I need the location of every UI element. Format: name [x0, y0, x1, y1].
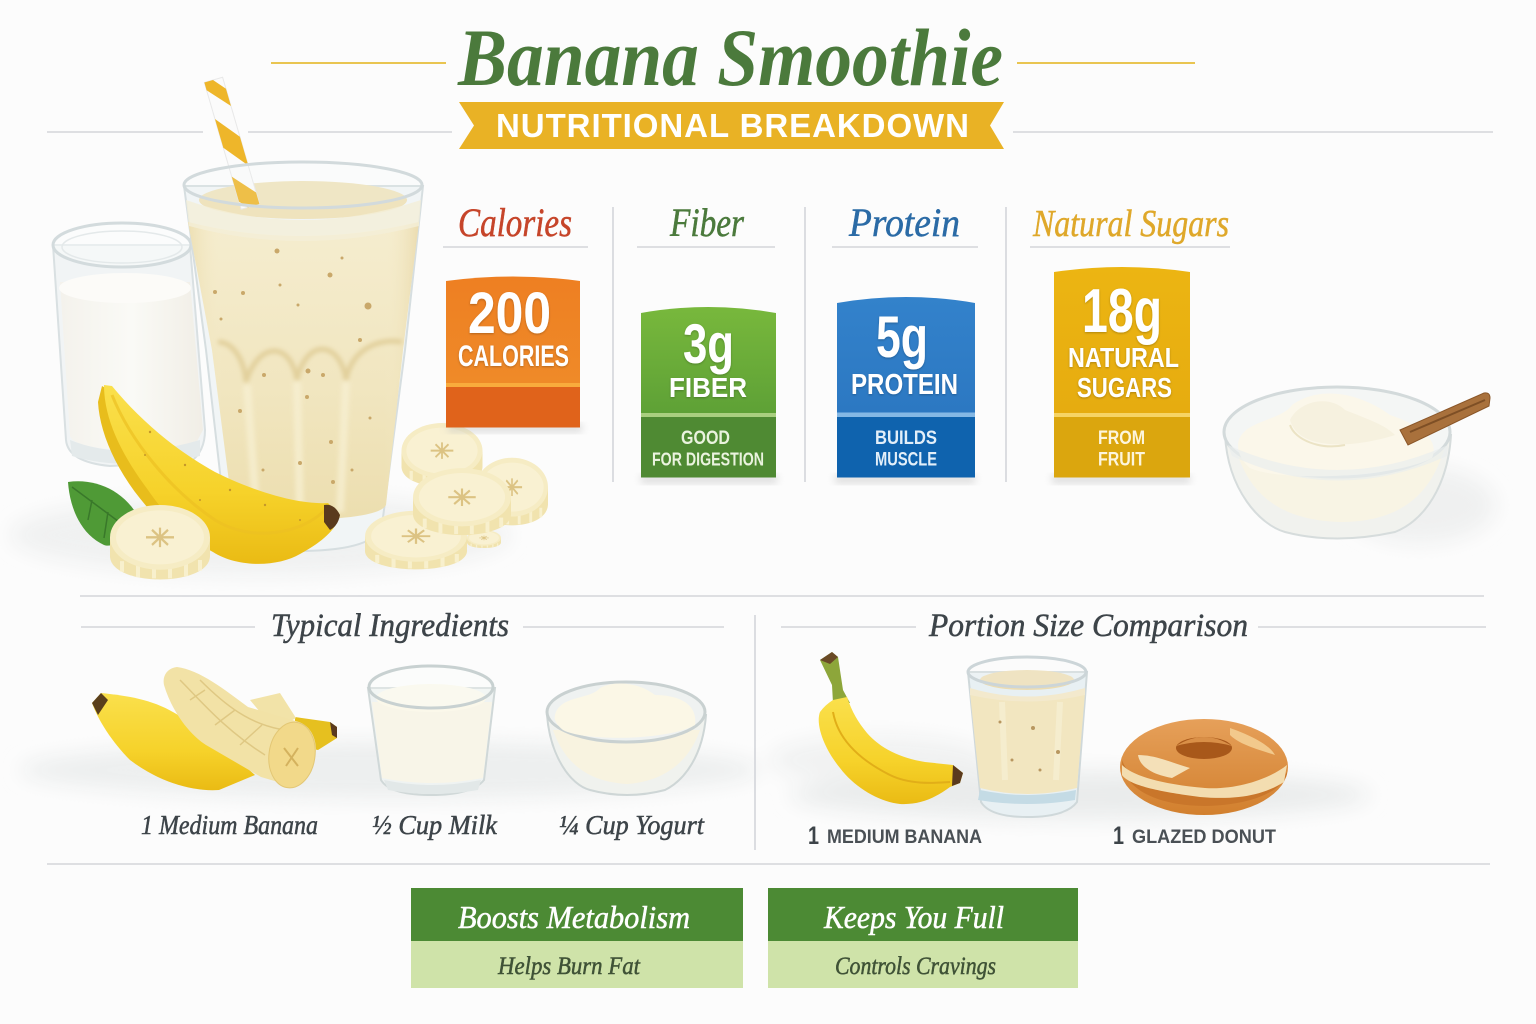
column: protein: Protein: [848, 200, 960, 245]
divider 1: [612, 207, 614, 482]
label: 1 medium banana: [808, 822, 982, 850]
natural sugars card: [1052, 267, 1190, 483]
illustration: front banana slice: [110, 505, 210, 579]
callout: boosts metabolism: Helps Burn Fat: [497, 953, 641, 980]
column: calories: Calories: [458, 200, 572, 245]
illustration: striped straw: [204, 77, 259, 209]
icon: bowl of yogurt: [547, 682, 706, 795]
protein card: BUILDS: [875, 428, 937, 449]
callout: keeps you full: Keeps You Full: [823, 899, 1004, 935]
column: protein: [832, 200, 978, 483]
calories card: CALORIES: [458, 340, 569, 373]
icon: bananas with peeled banana: [92, 667, 337, 791]
icon: glazed donut: [1120, 719, 1288, 815]
column: natural sugars: [1030, 203, 1230, 483]
protein card: MUSCLE: [875, 450, 937, 470]
natural sugars card: FRUIT: [1098, 450, 1145, 470]
protein card: PROTEIN: [851, 369, 958, 401]
label: 1 glazed donut: [1113, 822, 1276, 850]
label: 1 glazed donut: 1: [1113, 822, 1124, 850]
divider 2: [804, 207, 806, 482]
illustration: smoothie glass: [184, 181, 423, 551]
column: natural sugars: Natural Sugars: [1032, 203, 1229, 245]
column: fiber: [637, 200, 777, 483]
illustration: large banana: [98, 385, 340, 564]
subtitle ribbon: NUTRITIONAL BREAKDOWN: [496, 107, 970, 144]
natural sugars card: 18g: [1082, 277, 1162, 346]
panel: portion size comparison: [781, 608, 1486, 850]
fiber card: FIBER: [669, 372, 747, 403]
subtitle ribbon: [459, 102, 1004, 149]
icon: smoothie in glass: [968, 657, 1087, 817]
callout: keeps you full: [768, 888, 1078, 988]
icon: glass of milk: [368, 666, 495, 795]
title: Banana Smoothie: [457, 12, 1003, 103]
label: 1 medium banana: 1 Medium Banana: [141, 810, 318, 840]
panel: typical ingredients: [81, 608, 724, 840]
divider 3: [1005, 207, 1007, 482]
heading: portion size comparison: Portion Size Comparison: [928, 608, 1248, 644]
callout: boosts metabolism: [411, 888, 743, 988]
protein card: [835, 297, 975, 483]
label: half cup milk: ½ Cup Milk: [372, 810, 498, 840]
fiber card: FOR DIGESTION: [652, 450, 764, 470]
fiber card: 3g: [683, 312, 734, 375]
natural sugars card: NATURAL: [1068, 342, 1179, 373]
icon: whole banana: [819, 652, 963, 804]
label: 1 glazed donut: GLAZED DONUT: [1132, 827, 1276, 848]
protein card: 5g: [876, 305, 928, 370]
fiber card: [641, 307, 777, 483]
column: calories: [443, 200, 588, 432]
illustration: yogurt bowl with spoon: [1224, 387, 1490, 538]
callout: keeps you full: Controls Cravings: [835, 953, 996, 980]
illustration: mint leaf: [68, 481, 140, 546]
background shading: surfaces: [10, 467, 1495, 819]
calories card: [446, 276, 582, 432]
label: 1 medium banana: MEDIUM BANANA: [827, 827, 982, 848]
label: 1 medium banana: 1: [808, 822, 819, 850]
illustration: milk glass: [53, 223, 205, 466]
heading: typical ingredients: Typical Ingredients: [271, 608, 509, 644]
callout: boosts metabolism: Boosts Metabolism: [458, 899, 690, 935]
natural sugars card: FROM: [1098, 428, 1145, 449]
section rules: [47, 596, 1490, 864]
label: quarter cup yogurt: ¼ Cup Yogurt: [559, 810, 705, 840]
fiber card: GOOD: [681, 428, 730, 449]
calories card: 200: [468, 281, 551, 346]
natural sugars card: SUGARS: [1077, 372, 1172, 403]
illustration: banana slices pile: [365, 423, 548, 569]
column: fiber: Fiber: [669, 200, 744, 245]
header rules: [47, 131, 1493, 133]
illustration: smoothie glass rim: [184, 162, 422, 208]
